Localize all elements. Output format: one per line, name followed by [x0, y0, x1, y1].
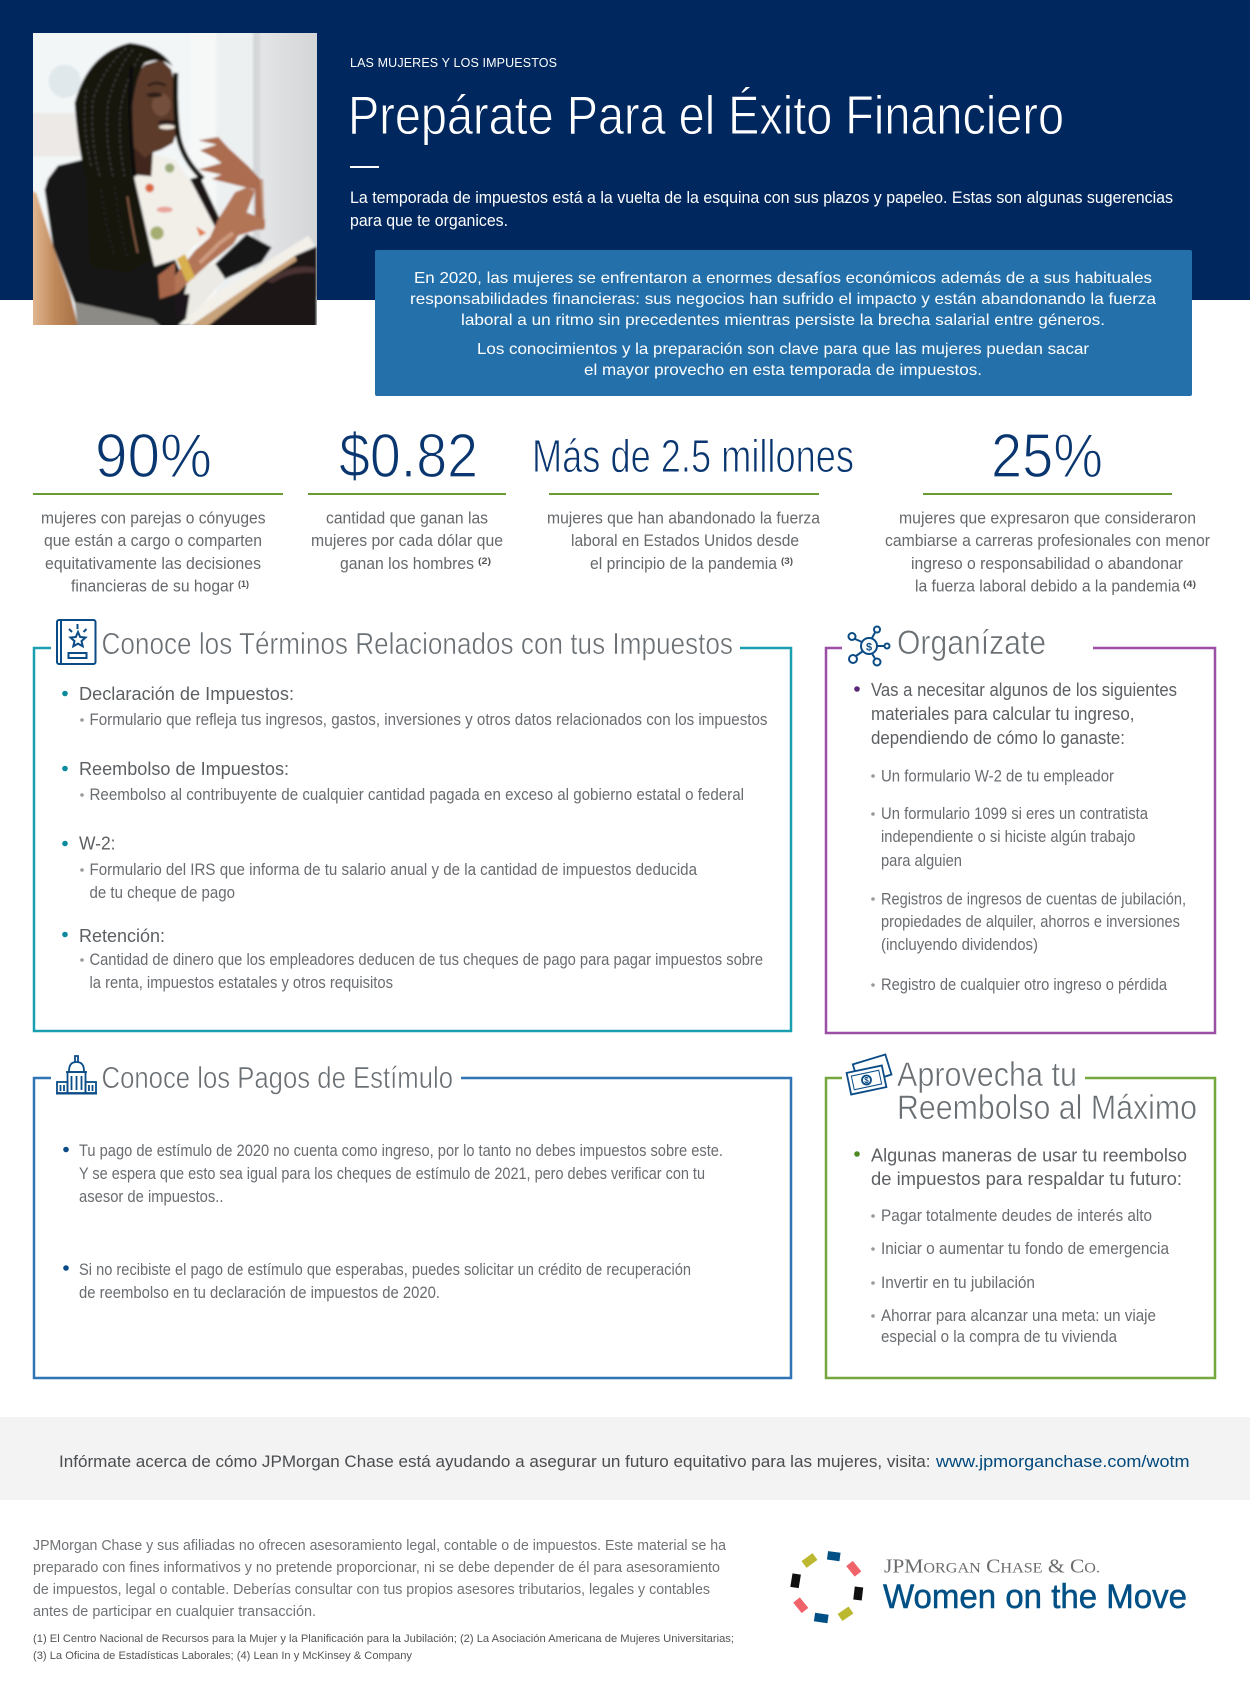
stat: 25%: 25%: [991, 422, 1103, 491]
term: W-2: W-2:: [79, 834, 116, 854]
call-to-action band: www.jpmorganchase.com/wotm: [935, 1452, 1190, 1471]
stat: 25%: (4): [1183, 579, 1196, 589]
sub-list: Registro de cualquier otro ingreso o pérdida: [881, 976, 1168, 994]
stat: 25%: la fuerza laboral debido a la pandemia: [915, 578, 1181, 596]
title rule: [350, 166, 379, 168]
icon: network with dollar: [848, 626, 890, 666]
stat: 25%: ingreso o responsabilidad o abandonar: [911, 555, 1183, 573]
term: W-2: [62, 834, 698, 902]
bullet: recovery credit: de reembolso en tu declaración de impuestos de 2020.: [79, 1284, 440, 1302]
callout box: responsabilidades financieras: sus negocios han sufrido el impacto y están abandonando la fuerza: [410, 291, 1156, 308]
lead bullet: Vas a necesitar algunos de los siguientes: [871, 680, 1177, 700]
stat: $0.82: ganan los hombres: [340, 555, 474, 573]
icon: book with star: [57, 620, 96, 664]
call-to-action band: Infórmate acerca de cómo JPMorgan Chase está ayudando a asegurar un futuro equitativo para las mujeres, visita:: [59, 1452, 930, 1471]
bullet: recovery credit: Si no recibiste el pago de estímulo que esperabas, puedes solicitar un crédito de recuperación: [79, 1261, 691, 1279]
photo: woman with braids gesturing: [30, 30, 320, 330]
disclaimer: JPMorgan Chase y sus afiliadas no ofrecen asesoramiento legal, contable o de impuestos. Este material se ha: [33, 1538, 727, 1554]
stat: 90%: financieras de su hogar: [71, 578, 234, 596]
term: retención: [62, 926, 763, 992]
sub-list: Ahorrar para alcanzar una meta: un viaje: [881, 1307, 1156, 1325]
heading: Aprovecha tu: [897, 1056, 1077, 1094]
header band: [0, 0, 1250, 300]
stat: 90%: que están a cargo o comparten: [44, 532, 262, 550]
disclaimer: preparado con fines informativos y no pretende proporcionar, ni se debe depender de él para asesoramiento: [33, 1560, 720, 1576]
stat: Más de 2.5 millones: (3): [781, 556, 793, 566]
term: retención: Cantidad de dinero que los empleadores deducen de tus cheques de pago para pagar impuestos sobre: [90, 951, 763, 969]
panel: organize: [826, 624, 1215, 1033]
lead bullet: [854, 680, 1177, 748]
lead bullet: Algunas maneras de usar tu reembolso: [871, 1146, 1187, 1166]
sub-list: [871, 1207, 1170, 1346]
intro text: [350, 188, 1173, 230]
heading: Conoce los Pagos de Estímulo: [102, 1060, 453, 1095]
sub-list: (incluyendo dividendos): [881, 936, 1038, 954]
sub-list: Iniciar o aumentar tu fondo de emergencia: [881, 1240, 1170, 1258]
sub-list: Invertir en tu jubilación: [881, 1274, 1035, 1292]
stat: $0.82: cantidad que ganan las: [326, 510, 488, 528]
disclaimer: de impuestos, legal o contable. Deberías consultar con tus propios asesores tributarios, legales y contables: [33, 1582, 710, 1598]
term: reembolso: Reembolso de Impuestos:: [79, 759, 289, 779]
stat: 25%: mujeres que expresaron que consideraron: [899, 510, 1196, 528]
callout box: [375, 250, 1192, 396]
callout box: En 2020, las mujeres se enfrentaron a enormes desafíos económicos además de a sus habituales: [414, 270, 1152, 287]
stat: Más de 2.5 millones: [532, 430, 854, 573]
stat: 90%: (1): [238, 579, 249, 589]
callout box: Los conocimientos y la preparación son clave para que las mujeres puedan sacar: [477, 341, 1090, 358]
icon: capitol building: [56, 1056, 97, 1094]
stat: $0.82: $0.82: [339, 422, 478, 491]
bullet: recovery credit: [63, 1261, 691, 1302]
lead bullet: de impuestos para respaldar tu futuro:: [871, 1169, 1182, 1189]
lead bullet: materiales para calcular tu ingreso,: [871, 704, 1134, 724]
stat: $0.82: mujeres por cada dólar que: [311, 532, 503, 550]
sub-list: Un formulario W-2 de tu empleador: [881, 768, 1114, 786]
panel: tax terms: [34, 620, 791, 1031]
footnotes: (3) La Oficina de Estadísticas Laborales; (4) Lean In y McKinsey & Company: [33, 1650, 412, 1662]
stat: 25%: [885, 422, 1210, 596]
eyebrow: LAS MUJERES Y LOS IMPUESTOS: [350, 56, 557, 70]
lead bullet: dependiendo de cómo lo ganaste:: [871, 728, 1125, 748]
bullet: 2020 stimulus: Y se espera que esto sea igual para los cheques de estímulo de 2021, pero debes verificar con tu: [79, 1165, 705, 1183]
sub-list: [871, 768, 1186, 994]
sub-list: independiente o si hiciste algún trabajo: [881, 828, 1136, 846]
logo: company name: JPMORGAN CHASE & CO.: [884, 1556, 1100, 1578]
term: reembolso: Reembolso al contribuyente de cualquier cantidad pagada en exceso al gobierno estatal o federal: [90, 786, 744, 804]
stat: 90%: mujeres con parejas o cónyuges: [41, 510, 266, 528]
panel: stimulus payments: [34, 1056, 791, 1378]
sub-list: para alguien: [881, 852, 962, 870]
heading: [897, 1056, 1197, 1127]
sub-list: Registros de ingresos de cuentas de jubilación,: [881, 890, 1186, 908]
term: declaración: [62, 684, 767, 729]
term: W-2: de tu cheque de pago: [90, 884, 235, 902]
heading: Conoce los Términos Relacionados con tus Impuestos: [102, 626, 733, 661]
heading: Reembolso al Máximo: [897, 1089, 1197, 1127]
sub-list: propiedades de alquiler, ahorros e inversiones: [881, 913, 1180, 931]
term: W-2: Formulario del IRS que informa de tu salario anual y de la cantidad de impuestos deducida: [90, 861, 698, 879]
stat: 90%: [33, 422, 283, 596]
icon: banknotes: [847, 1054, 891, 1095]
icon: banknotes: $: [864, 1076, 869, 1085]
callout box: el mayor provecho en esta temporada de impuestos.: [584, 362, 982, 379]
call-to-action band: [0, 1417, 1250, 1500]
stat: 90%: equitativamente las decisiones: [45, 555, 261, 573]
stat: $0.82: [308, 422, 506, 573]
stat: Más de 2.5 millones: el principio de la pandemia: [590, 555, 778, 573]
stat: $0.82: (2): [478, 556, 491, 566]
sub-list: especial o la compra de tu vivienda: [881, 1328, 1118, 1346]
disclaimer: [33, 1538, 727, 1620]
footnotes: (1) El Centro Nacional de Recursos para la Mujer y la Planificación para la Jubilación; (2) La Asociación Americana de Mujeres Universitarias;: [33, 1633, 734, 1645]
term: retención: Retención:: [79, 926, 165, 946]
term: retención: la renta, impuestos estatales y otros requisitos: [90, 974, 393, 992]
term: declaración: Declaración de Impuestos:: [79, 684, 294, 704]
heading: Organízate: [897, 624, 1046, 662]
term: reembolso: [62, 759, 744, 804]
bullet: 2020 stimulus: Tu pago de estímulo de 2020 no cuenta como ingreso, por lo tanto no debes impuestos sobre este.: [79, 1142, 723, 1160]
bullet: 2020 stimulus: [63, 1142, 723, 1206]
stat: Más de 2.5 millones: Más de 2.5 millones: [532, 430, 854, 482]
callout box: laboral a un ritmo sin precedentes mientras persiste la brecha salarial entre géneros.: [461, 312, 1105, 329]
sub-list: Pagar totalmente deudes de interés alto: [881, 1207, 1152, 1225]
bullet: 2020 stimulus: asesor de impuestos..: [79, 1188, 224, 1206]
lead bullet: [854, 1146, 1187, 1189]
intro text: La temporada de impuestos está a la vuelta de la esquina con sus plazos y papeleo. Estas son algunas sugerencias: [350, 188, 1173, 207]
term: declaración: Formulario que refleja tus ingresos, gastos, inversiones y otros datos relacionados con los impuestos: [90, 711, 768, 729]
disclaimer: antes de participar en cualquier transacción.: [33, 1604, 316, 1620]
stat: Más de 2.5 millones: mujeres que han abandonado la fuerza: [547, 510, 821, 528]
title: Prepárate Para el Éxito Financiero: [348, 84, 1064, 146]
stat: 25%: cambiarse a carreras profesionales con menor: [885, 532, 1210, 550]
stat: Más de 2.5 millones: laboral en Estados Unidos desde: [571, 532, 799, 550]
intro text: para que te organices.: [350, 211, 508, 230]
icon: network with dollar: $: [866, 642, 872, 654]
panel: make the most of your refund: [826, 1054, 1215, 1378]
logo: Women on the Move ring: [794, 1555, 859, 1619]
sub-list: Un formulario 1099 si eres un contratista: [881, 805, 1149, 823]
footnotes: [33, 1633, 734, 1662]
stat: 90%: 90%: [95, 422, 212, 491]
logo: Women on the Move: Women on the Move: [883, 1578, 1187, 1616]
